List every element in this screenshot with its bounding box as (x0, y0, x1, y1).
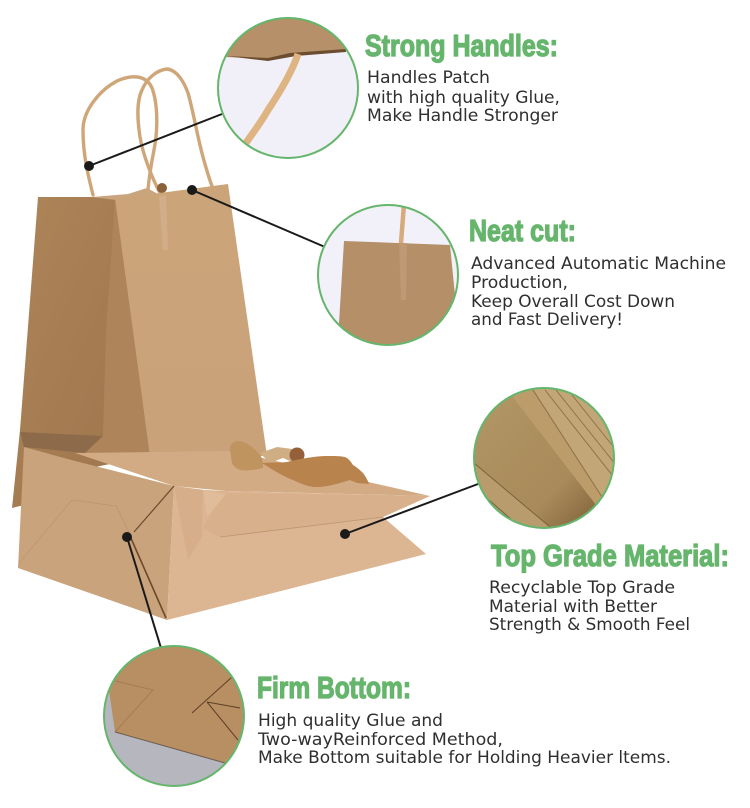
front face (167, 486, 430, 620)
text: firm bottom description (257, 711, 671, 767)
heading: firm bottom: Firm Bottom: (257, 670, 411, 705)
text: neat cut description: Keep Overall Cost Down (471, 292, 675, 311)
product: bag lying flat (18, 441, 430, 620)
crease lines (130, 486, 174, 618)
product: standing kraft bag (12, 69, 267, 508)
text: neat cut description (471, 254, 726, 329)
front flap (203, 493, 430, 537)
leader line: handles (84, 114, 222, 171)
handles (83, 69, 212, 195)
text: strong handles description (367, 68, 560, 125)
text: neat cut description: and Fast Delivery! (471, 310, 623, 329)
text: strong handles description: with high quality Glue, (367, 88, 560, 107)
side face (18, 447, 174, 620)
back fold (20, 432, 103, 453)
text: top grade material description: Material with Better (489, 597, 657, 616)
text: top grade material description: Strength & Smooth Feel (489, 615, 690, 634)
text: top grade material description: Recyclable Top Grade (489, 578, 675, 597)
ribbon handle (230, 441, 369, 487)
front panel (115, 184, 267, 456)
gusset fold (174, 486, 203, 560)
detail circle: neat cut (317, 204, 460, 346)
heading: neat cut: Neat cut: (469, 213, 576, 248)
detail circle: handles (217, 17, 359, 159)
leader line: material (340, 484, 478, 539)
rim and knot (92, 183, 167, 200)
top face (75, 451, 430, 496)
side gusset (85, 200, 150, 456)
heading: strong handles: Strong Handles: (365, 28, 558, 63)
text: neat cut description: Advanced Automatic Machine (471, 254, 726, 273)
text: strong handles description: Make Handle Stronger (367, 106, 558, 125)
text: firm bottom description: Two-wayReinforced Method, (257, 730, 503, 749)
text: firm bottom description: Make Bottom suitable for Holding Heavier ltems. (258, 748, 671, 767)
leader line: neat cut (187, 185, 325, 247)
back panel (12, 197, 150, 508)
text: neat cut description: Production, (471, 273, 568, 292)
detail circle: material (474, 387, 616, 529)
detail circle: firm bottom (103, 645, 245, 787)
text: strong handles description: Handles Patch (367, 68, 490, 87)
text: firm bottom description: High quality Glue and (258, 711, 443, 730)
leader line: bottom (122, 532, 161, 648)
text: top grade material description (489, 578, 690, 634)
